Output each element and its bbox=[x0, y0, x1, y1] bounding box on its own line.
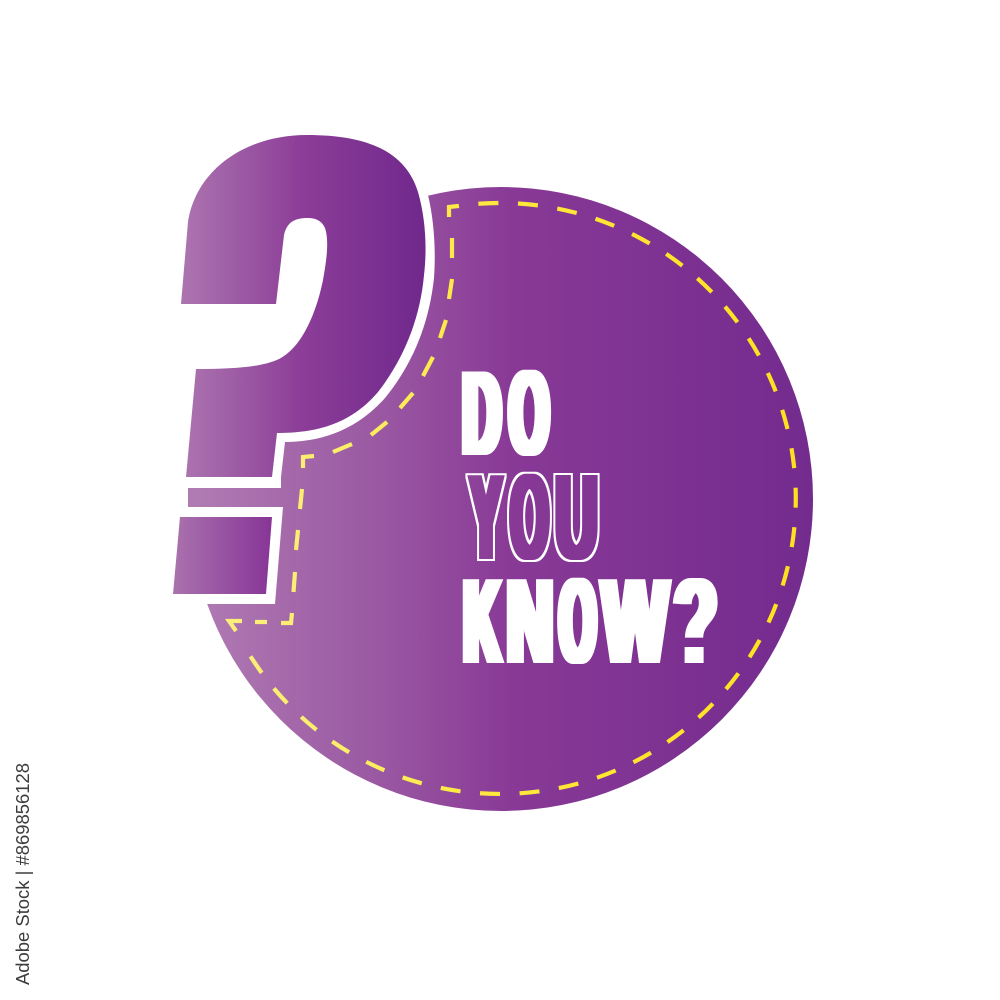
icon: question mark bbox=[173, 135, 426, 594]
text: KNOW?: N bbox=[507, 553, 553, 689]
question mark dot bbox=[173, 517, 272, 594]
heading: do you know bbox=[463, 345, 717, 689]
text: YOU (outlined): Y bbox=[470, 449, 502, 585]
panel: purple circle badge bbox=[189, 187, 813, 811]
question mark hook and stem bbox=[181, 135, 426, 477]
text: KNOW?: O bbox=[560, 553, 596, 689]
text: YOU (outlined): O bbox=[510, 449, 548, 585]
white cut-out around question mark bbox=[100, 100, 435, 640]
text: DO: D bbox=[463, 345, 501, 481]
text: KNOW?: ? bbox=[674, 553, 717, 689]
text: KNOW?: W bbox=[602, 553, 668, 689]
yellow dashed stitching bbox=[229, 203, 796, 794]
text: KNOW?: K bbox=[464, 553, 500, 689]
question mark divider band bbox=[188, 488, 285, 507]
heading: do you know: O bbox=[510, 345, 549, 481]
heading: do you know: U bbox=[555, 449, 598, 585]
caption: stock id: Adobe Stock | #869856128 bbox=[13, 763, 33, 985]
